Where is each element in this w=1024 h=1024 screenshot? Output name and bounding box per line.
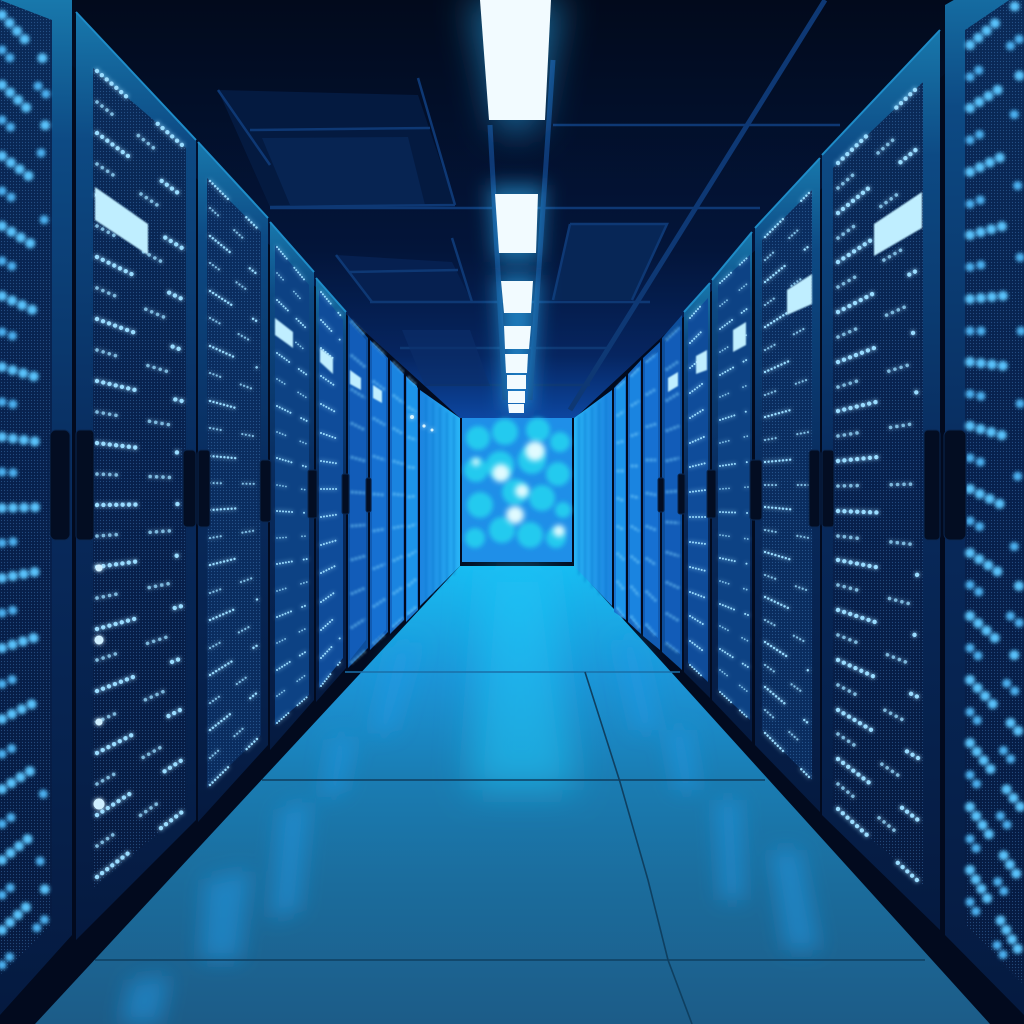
left rack 0 xyxy=(0,0,72,1015)
ceiling xyxy=(0,0,1024,418)
floor tile seams xyxy=(95,780,925,960)
floor reflections from right racks xyxy=(615,640,820,950)
status screen xyxy=(275,318,293,348)
left rack 3 xyxy=(270,222,314,750)
status screen xyxy=(696,350,707,374)
right rack handles xyxy=(658,430,966,540)
right rack 2 xyxy=(755,158,820,812)
left rack far group xyxy=(410,390,460,606)
end wall light panel xyxy=(462,418,572,562)
right rack 0 xyxy=(945,0,1024,1015)
ceiling vent: right xyxy=(553,224,667,300)
bright indicator dots xyxy=(94,564,104,810)
left rack 5 xyxy=(348,315,368,668)
ceiling vent: small left xyxy=(336,238,472,302)
left rack 6 xyxy=(370,340,388,650)
floor reflections from left racks xyxy=(120,640,420,1024)
left rack 2 xyxy=(198,142,268,822)
left rack 4 xyxy=(316,278,346,702)
ceiling vent: large left xyxy=(218,78,455,207)
right rack 6 xyxy=(643,342,660,650)
status screen xyxy=(95,187,148,255)
status screen xyxy=(668,372,678,392)
right rack far group xyxy=(574,390,612,606)
left rack 8 xyxy=(406,376,418,622)
right rack 4 xyxy=(684,283,710,698)
floor centre reflection xyxy=(470,570,575,790)
status screen xyxy=(733,322,746,352)
right rack 7 xyxy=(628,360,641,634)
right rack 5 xyxy=(662,315,682,670)
status light xyxy=(373,385,382,403)
status screen xyxy=(874,192,922,256)
ceiling lights xyxy=(480,0,551,413)
right rack 8 xyxy=(614,376,626,620)
ceiling grid beams xyxy=(270,0,840,410)
left rack 7 xyxy=(390,360,404,634)
status screen xyxy=(320,348,333,374)
floor xyxy=(35,566,990,1024)
right rack 1 xyxy=(822,30,940,930)
right rack 3 xyxy=(712,232,752,742)
ceiling light glow xyxy=(470,0,562,410)
status screen xyxy=(350,370,361,390)
far status lights xyxy=(410,415,434,432)
floor crack line xyxy=(585,672,692,1024)
faint far floor seam xyxy=(345,671,680,673)
status screen xyxy=(787,274,812,315)
left rack 1 xyxy=(76,12,196,940)
left rack handles xyxy=(50,430,371,540)
